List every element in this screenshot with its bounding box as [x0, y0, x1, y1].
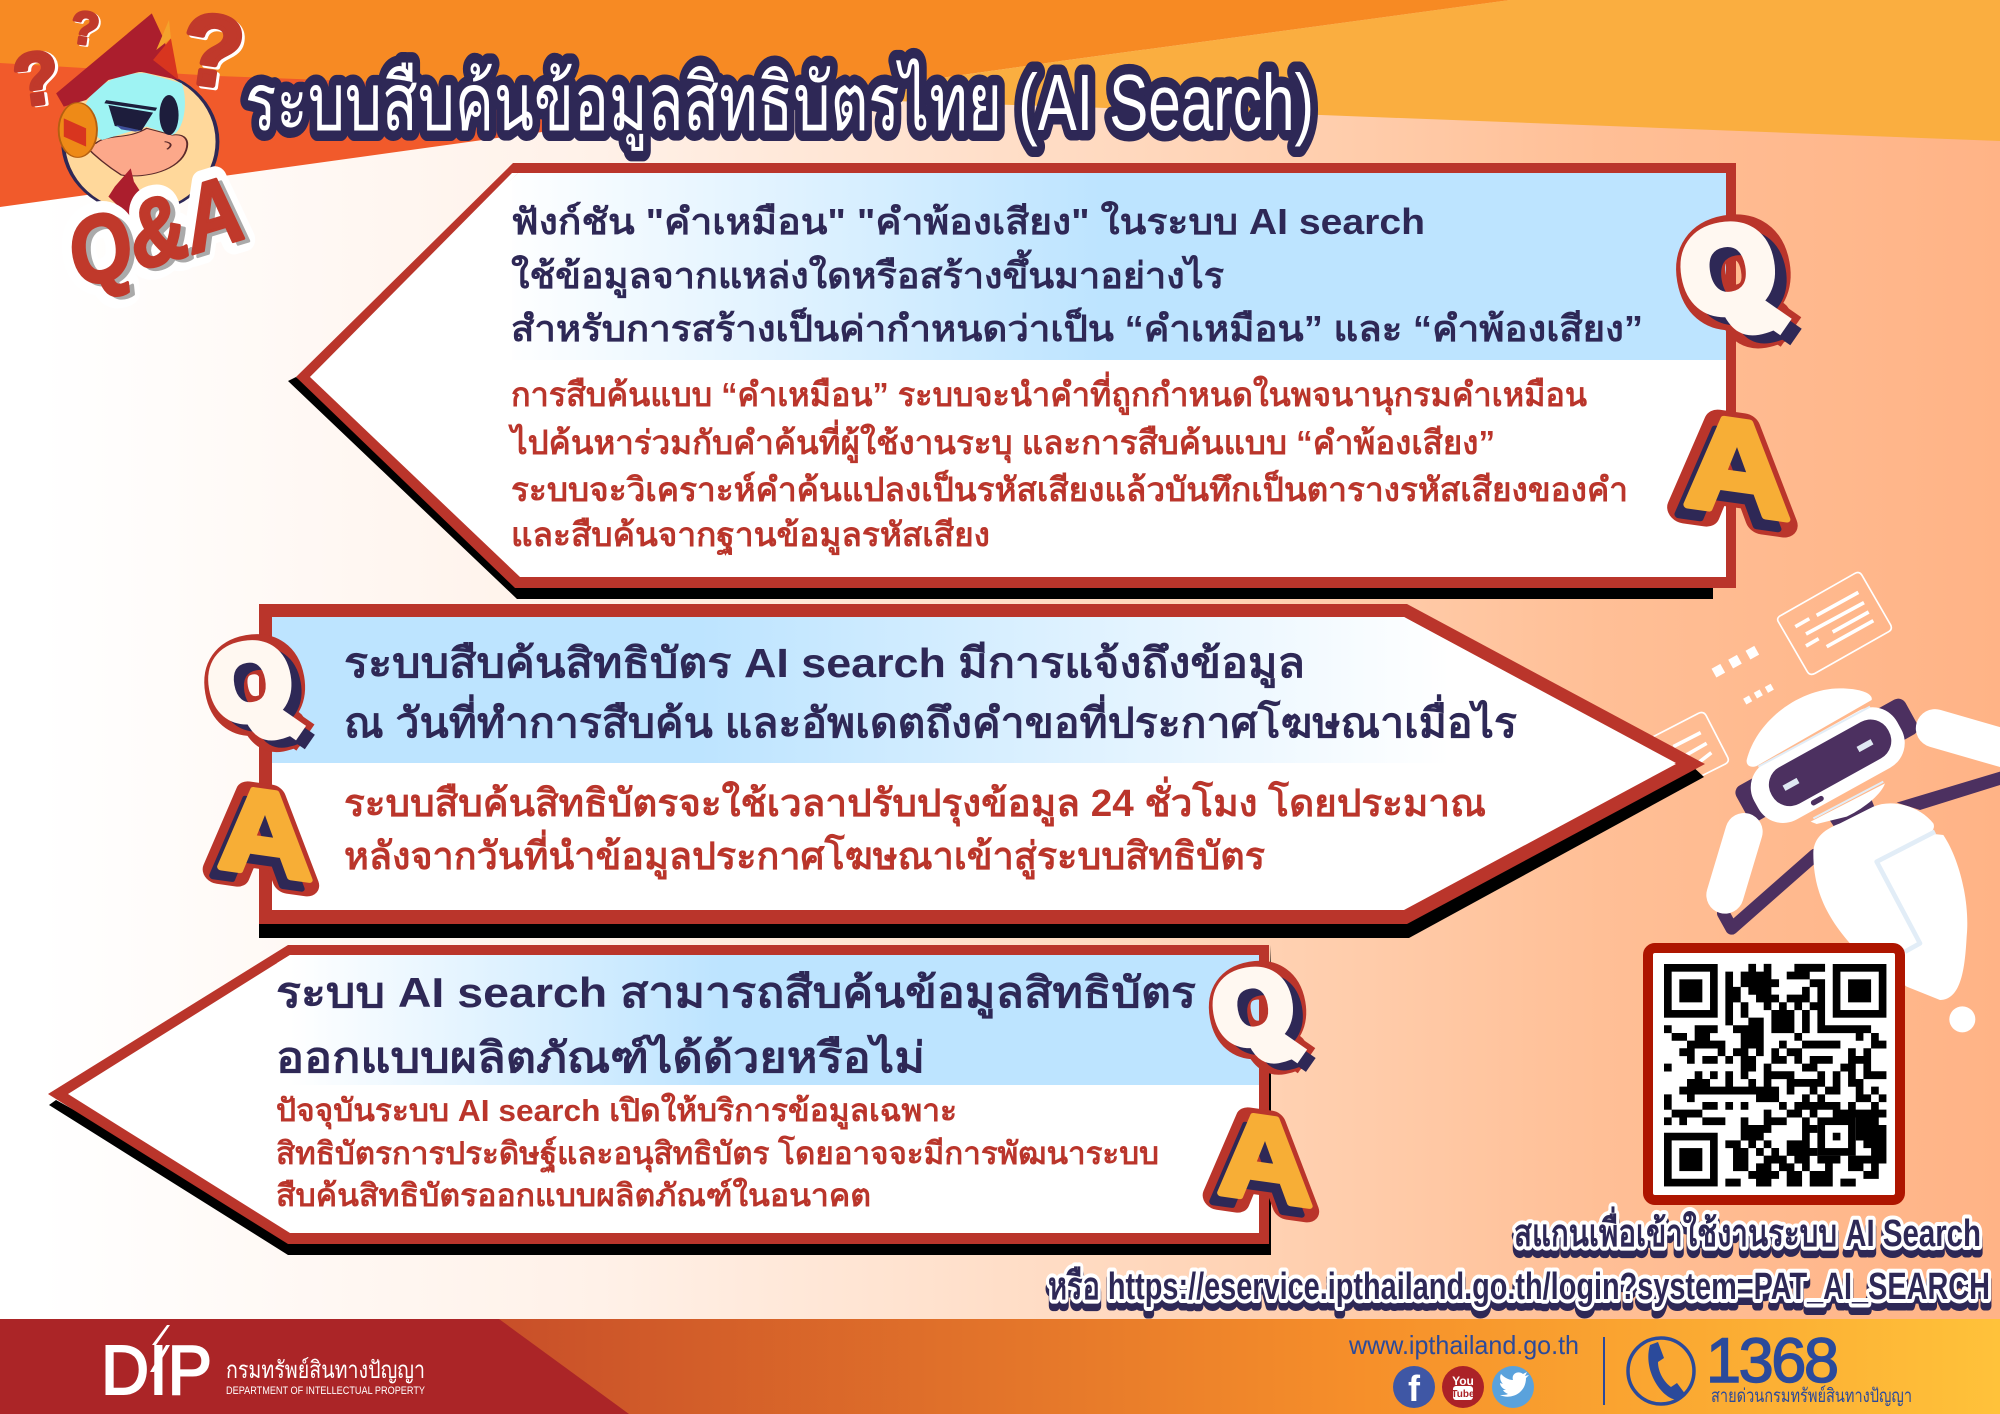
answer 3 text: สิทธิบัตรการประดิษฐ์และอนุสิทธิบัตร โดยอาจจะมีการพัฒนาระบบ — [276, 1135, 1159, 1174]
answer 1 text: และสืบค้นจากฐานข้อมูลรหัสเสียง — [511, 516, 990, 556]
icon: note card upper — [1778, 573, 1891, 674]
divider — [1603, 1337, 1605, 1405]
panel: question 1 arrow box — [288, 163, 1736, 599]
question 3 text — [276, 969, 1196, 1081]
question marks: ? — [11, 35, 68, 123]
icon: A badge 1: A — [1675, 394, 1781, 557]
icon: youtube: You — [1452, 1374, 1474, 1388]
icon: A badge 3: A — [1209, 1094, 1305, 1240]
robot head — [1741, 688, 1915, 833]
answer 1 text: ระบบจะวิเคราะห์คำค้นแปลงเป็นรหัสเสียงแล้วบันทึกเป็นตารางรหัสเสียงของคำ — [511, 469, 1628, 508]
footer band — [0, 1319, 2000, 1414]
answer 2 text: ระบบสืบค้นสิทธิบัตรจะใช้เวลาปรับปรุงข้อมูล 24 ชั่วโมง โดยประมาณ — [344, 776, 1486, 827]
Q&A heading sticker: Q&A — [54, 155, 255, 308]
question 2 text: ระบบสืบค้นสิทธิบัตร AI search มีการแจ้งถึงข้อมูล — [344, 640, 1305, 689]
question marks: ? — [8, 34, 65, 123]
panel: question 3 arrow box — [48, 945, 1271, 1255]
icon: mascot with question marks — [8, 0, 253, 218]
icon: youtube — [1442, 1366, 1484, 1408]
question 1 text — [511, 200, 1643, 349]
answer 2 text — [344, 776, 1486, 880]
icon: youtube: Tube — [1451, 1389, 1475, 1400]
icon: A badge 2: A — [213, 763, 309, 910]
icon: Q badge 3: Q — [1210, 949, 1306, 1073]
robot illustration — [1653, 573, 2000, 1032]
Q&A heading sticker: Q&A — [54, 155, 255, 308]
mascot eyes — [105, 95, 179, 149]
icon: A badge 3: A — [1213, 1089, 1309, 1236]
question marks: ? — [67, 0, 103, 56]
icon: Q badge 2: Q — [210, 626, 310, 754]
department name: กรมทรัพย์สินทางปัญญา — [226, 1356, 425, 1384]
icon: facebook: f — [1408, 1368, 1421, 1409]
question 2 text — [344, 640, 1517, 746]
mascot goggles — [85, 73, 185, 140]
answer 2 text: หลังจากวันที่นำข้อมูลประกาศโฆษณาเข้าสู่ระบบสิทธิบัตร — [344, 829, 1266, 880]
mascot headphone — [59, 103, 97, 157]
question 2 text: ณ วันที่ทำการสืบค้น และอัพเดตถึงคำขอที่ประกาศโฆษณาเมื่อไร — [344, 694, 1517, 746]
message dots — [1712, 646, 1774, 705]
mascot hat — [56, 13, 179, 107]
icon: Q badge 1: Q — [1677, 200, 1790, 346]
icon: A badge 1: A — [1684, 385, 1790, 548]
mascot body oval — [63, 71, 217, 212]
website: www.ipthailand.go.th — [1348, 1330, 1579, 1360]
icon: Q badge 1: Q — [1671, 197, 1785, 343]
question 1 text: ใช้ข้อมูลจากแหล่งใดหรือสร้างขึ้นมาอย่างไร — [511, 249, 1225, 299]
icon: A badge 1: A — [1679, 389, 1786, 552]
icon: phone — [1628, 1338, 1694, 1404]
icon: Q badge 3: Q — [1205, 946, 1301, 1070]
icon: twitter — [1492, 1366, 1534, 1408]
answer 1 text: การสืบค้นแบบ “คำเหมือน” ระบบจะนำคำที่ถูกกำหนดในพจนานุกรมคำเหมือน — [511, 371, 1587, 416]
department name: DEPARTMENT OF INTELLECTUAL PROPERTY — [226, 1385, 426, 1397]
icon: Q badge 2: Q — [205, 622, 305, 750]
question 1 text: สำหรับการสร้างเป็นค่ากำหนดว่าเป็น “คำเหมือน” และ “คำพ้องเสียง” — [511, 306, 1643, 349]
question 1 text: ฟังก์ชัน "คำเหมือน" "คำพ้องเสียง" ในระบบ AI search — [511, 200, 1425, 242]
icon: A badge 2: A — [209, 768, 305, 914]
icon: note card lower — [1653, 713, 1728, 780]
question 3 text: ออกแบบผลิตภัณฑ์ได้ด้วยหรือไม่ — [276, 1033, 925, 1081]
answer 3 text — [276, 1092, 1159, 1213]
DIP logo: DIP — [101, 1331, 212, 1409]
QR code — [1648, 948, 1900, 1200]
department name — [226, 1356, 426, 1397]
robot wires — [1723, 696, 2000, 928]
answer 3 text: ปัจจุบันระบบ AI search เปิดให้บริการข้อมูลเฉพาะ — [276, 1092, 957, 1130]
question 3 text: ระบบ AI search สามารถสืบค้นข้อมูลสิทธิบัตร — [276, 969, 1196, 1019]
icon: Q badge 3: Q — [1215, 953, 1311, 1077]
icon: A badge 3: A — [1217, 1086, 1313, 1232]
mascot tie — [108, 168, 143, 218]
icon: Q badge 1: Q — [1683, 205, 1796, 351]
icon: A badge 2: A — [217, 760, 313, 906]
title: ระบบสืบค้นข้อมูลสิทธิบัตรไทย (AI Search) — [245, 58, 1314, 151]
panel: question 2 arrow box — [259, 604, 1705, 938]
question marks — [8, 0, 253, 123]
icon: Q badge 2: Q — [200, 619, 300, 747]
hotline caption: สายด่วนกรมทรัพย์สินทางปัญญา — [1711, 1385, 1912, 1407]
hotline number: 1368 — [1706, 1326, 1839, 1396]
answer 1 text: ไปค้นหาร่วมกับคำค้นที่ผู้ใช้งานระบุ และการสืบค้นแบบ “คำพ้องเสียง” — [508, 419, 1495, 464]
icon: facebook — [1393, 1366, 1435, 1409]
Q&A heading sticker: Q&A — [59, 158, 260, 310]
question marks: ? — [69, 2, 104, 57]
mascot face — [86, 128, 187, 176]
robot body — [1813, 803, 1967, 1000]
robot arms — [1725, 728, 2000, 895]
answer 1 text — [508, 371, 1628, 556]
answer 3 text: สืบค้นสิทธิบัตรออกแบบผลิตภัณฑ์ในอนาคต — [276, 1177, 871, 1213]
dot — [1949, 1006, 1975, 1032]
